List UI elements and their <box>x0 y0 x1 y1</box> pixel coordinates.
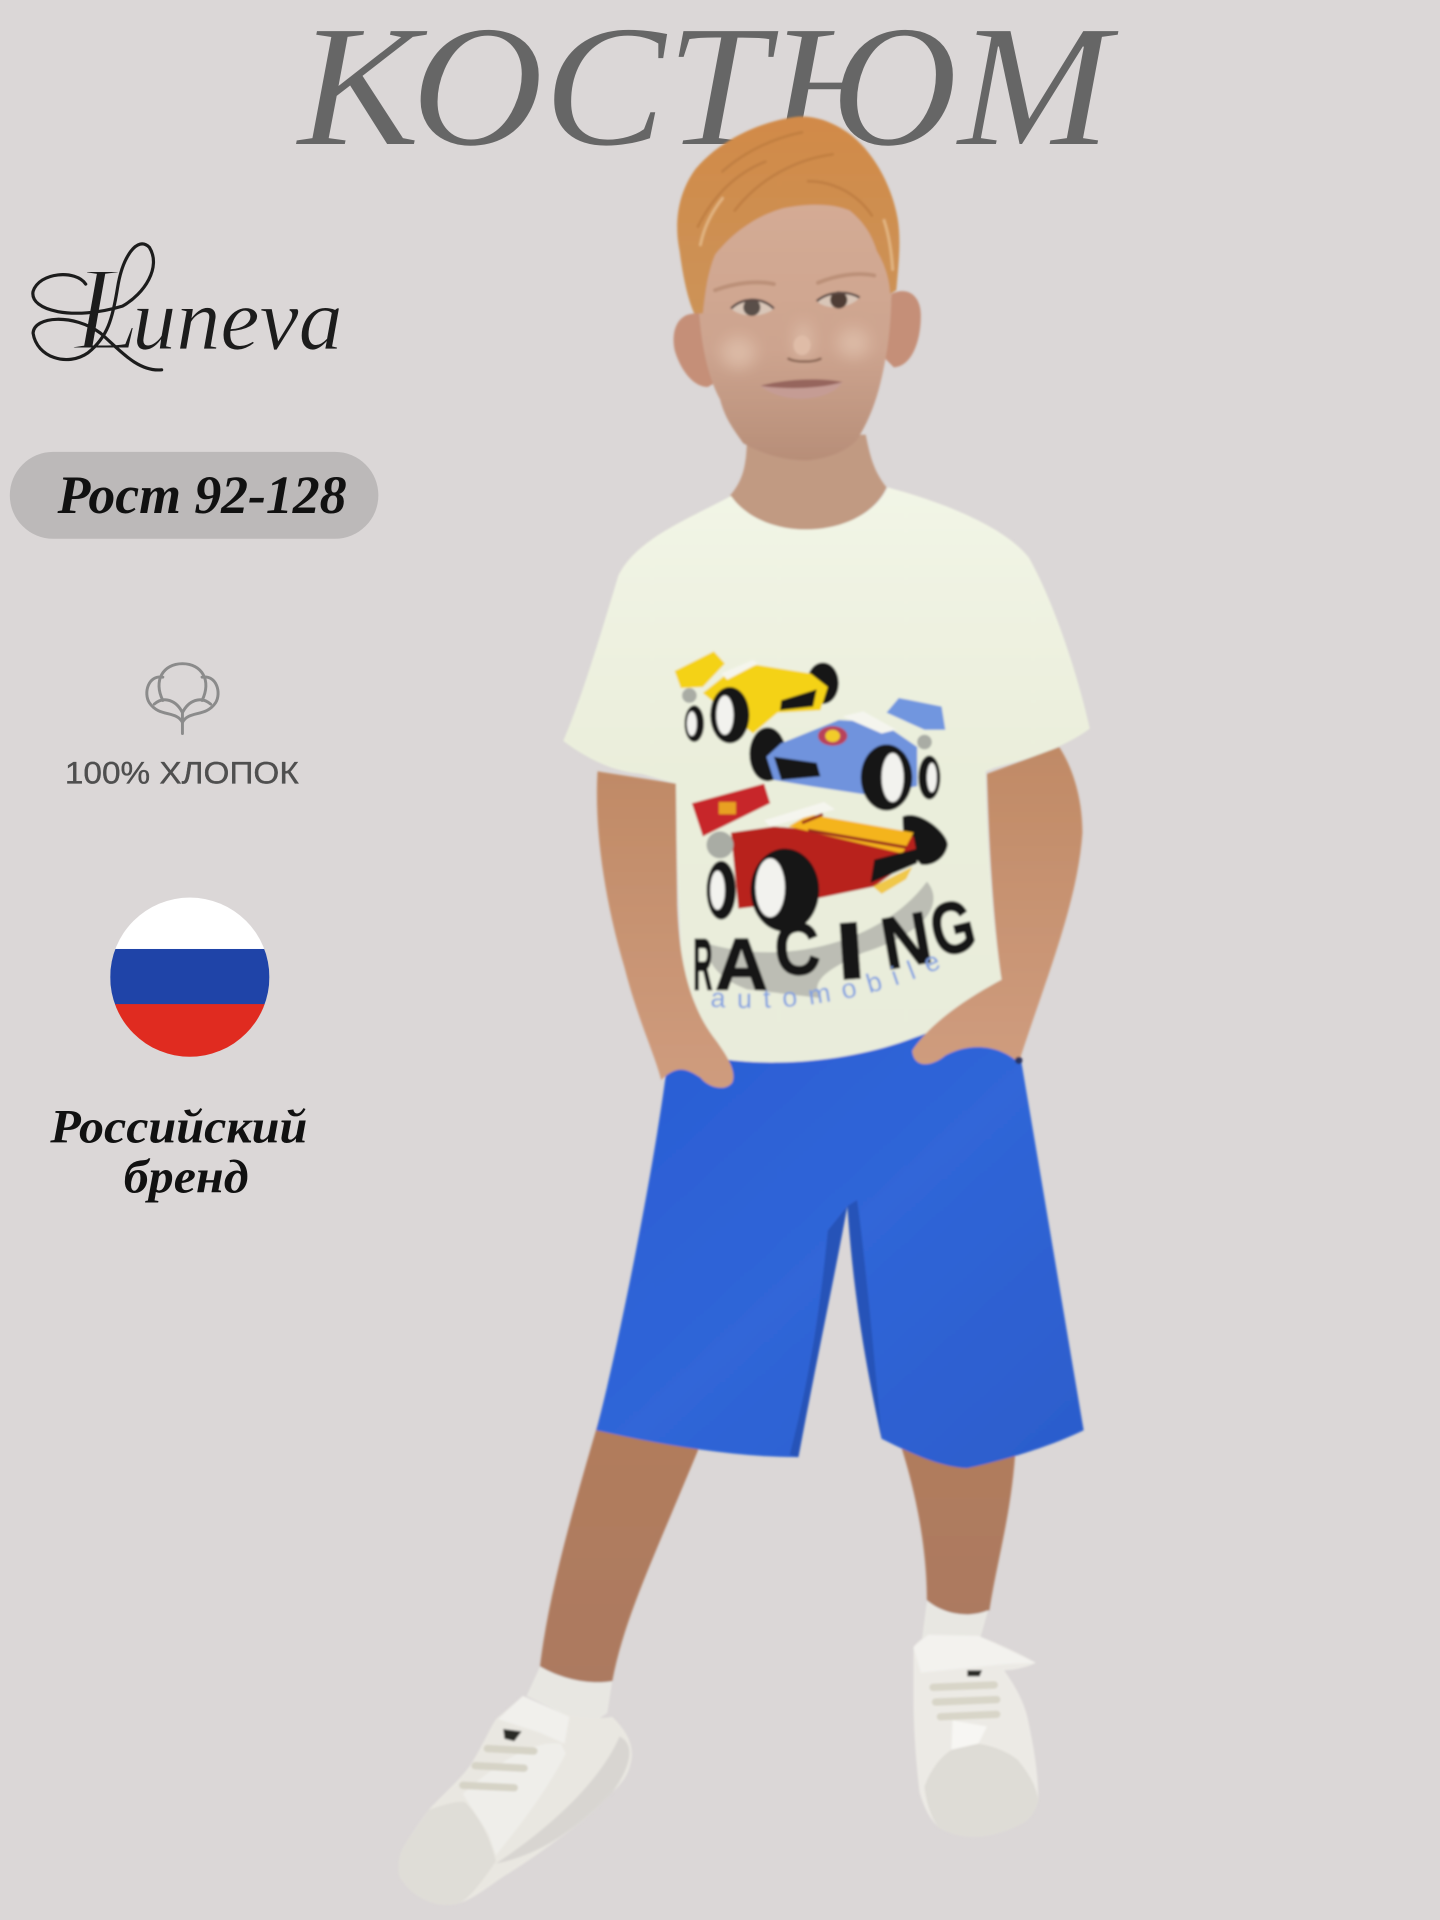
blue car <box>749 698 945 811</box>
t-shirt graphic: racing lettering: G <box>922 882 983 973</box>
boy model <box>430 115 1090 1901</box>
cotton label: 100% ХЛОПОК <box>65 755 299 791</box>
russian brand caption: Российский <box>49 1100 307 1153</box>
t-shirt graphic: racing lettering <box>693 882 983 1005</box>
t-shirt graphic: racing lettering: N <box>875 895 938 986</box>
right shoe <box>913 1635 1038 1837</box>
hair <box>677 116 899 313</box>
track shadow <box>705 882 934 998</box>
left shoe <box>398 1696 632 1905</box>
yellow car <box>675 651 839 743</box>
left sock <box>527 1667 612 1727</box>
left arm <box>597 771 733 1088</box>
cheek highlights <box>721 322 869 369</box>
brand logo <box>33 242 343 375</box>
right arm <box>912 747 1082 1064</box>
t-shirt graphic: racing lettering: C <box>772 906 823 992</box>
right sock <box>922 1600 988 1641</box>
eyes <box>731 291 860 316</box>
hair strands <box>698 132 872 227</box>
pocket button <box>1015 1057 1022 1064</box>
icon: russian flag <box>110 898 269 1058</box>
brand logo: L <box>71 242 140 375</box>
face <box>699 184 891 460</box>
t-shirt graphic: racing lettering: I <box>833 906 868 998</box>
russian brand caption: бренд <box>124 1151 249 1204</box>
neck <box>730 435 887 533</box>
t-shirt graphic: automobile lettering: automobile <box>710 955 940 1010</box>
left leg <box>540 1408 705 1682</box>
eyebrows <box>715 274 874 290</box>
infographic canvas <box>10 30 1118 1901</box>
t-shirt graphic: racing lettering: R <box>693 922 713 1005</box>
red car <box>692 784 948 932</box>
right leg <box>888 1408 1016 1614</box>
t-shirt graphic: racing lettering: A <box>715 922 768 1005</box>
russian brand caption <box>49 1100 307 1204</box>
height range pill: Рост 92-128 <box>57 465 347 525</box>
t-shirt <box>563 487 1090 1062</box>
mouth <box>760 379 842 399</box>
icon: cotton boll <box>147 664 218 733</box>
nose <box>789 336 820 362</box>
left ear <box>674 313 716 387</box>
brand logo: uneva <box>132 271 343 369</box>
t-shirt graphic: racing cars <box>675 651 948 998</box>
right ear <box>884 291 921 367</box>
height range pill <box>10 452 378 539</box>
cotton badge <box>65 664 299 791</box>
shorts <box>596 1022 1084 1468</box>
